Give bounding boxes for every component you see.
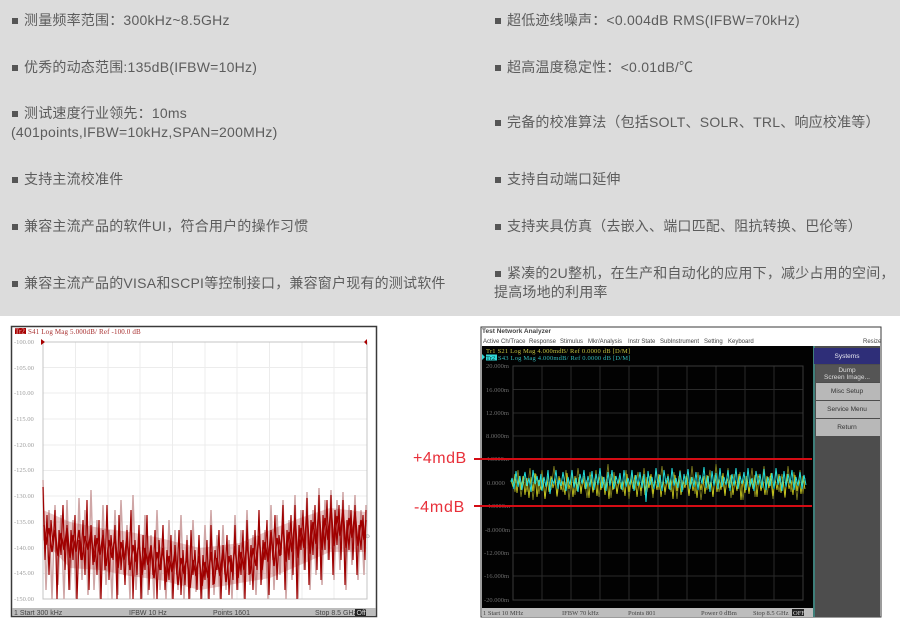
- y axis labels: -20.000m: [484, 597, 509, 604]
- window title and menu: Instr State: [628, 339, 656, 345]
- status bar: 1 Start 10 MHz: [483, 610, 523, 617]
- chart header: Tr2: [15, 328, 25, 336]
- window title and menu: Setting: [704, 339, 723, 345]
- text: compact chassis: 提高场地的利用率: [494, 284, 608, 300]
- y axis labels: -4.0000m: [485, 503, 510, 510]
- softkey: Service Menu: Service Menu: [827, 406, 867, 413]
- chart status bar: IFBW 10 Hz: [129, 610, 167, 617]
- status bar: Stop 8.5 GHz: [753, 610, 789, 617]
- softkey: Return: [816, 419, 880, 436]
- y axis labels: -130.00: [14, 493, 34, 500]
- softkey: Misc Setup: [816, 383, 880, 400]
- window title and menu: Response: [529, 339, 557, 345]
- y axis labels: -150.00: [14, 596, 34, 603]
- yellow trace: [511, 473, 805, 500]
- window title and menu: Keyboard: [728, 339, 754, 345]
- y axis labels: [14, 339, 34, 603]
- text: trace noise: 超低迹线噪声：<0.004dB RMS(IFBW=70kHz): [507, 12, 800, 28]
- text: fixture simulation: 支持夹具仿真（去嵌入、端口匹配、阻抗转换、巴伦等）: [507, 218, 862, 234]
- y axis labels: -105.00: [14, 365, 34, 372]
- chart header: S41 Log Mag 5.000dB/ Ref -100.0 dB: [28, 328, 141, 336]
- text: software UI: 兼容主流产品的软件UI，符合用户的操作习惯: [24, 218, 308, 234]
- y axis labels: -135.00: [14, 519, 34, 526]
- softkey: Dump Screen Image: [816, 365, 880, 382]
- y axis labels: 4.0000m: [486, 456, 509, 463]
- window title and menu: Active Ch/Trace: [483, 339, 526, 345]
- plot grid: [513, 366, 803, 600]
- y axis labels: -12.000m: [484, 550, 509, 557]
- text: test speed: (401points,IFBW=10kHz,SPAN=200MHz): [11, 124, 278, 140]
- text: temperature stability: 超高温度稳定性：<0.01dB/℃: [507, 59, 693, 75]
- status bar: OFF: [793, 610, 805, 617]
- window title and menu: Mkr/Analysis: [588, 339, 622, 345]
- text: compact chassis: 紧凑的2U整机，在生产和自动化的应用下，减少占用的空间，: [507, 265, 895, 281]
- status bar: Power 0 dBm: [701, 610, 737, 617]
- status bar: IFBW 70 kHz: [562, 610, 599, 617]
- softkey panel: [813, 346, 880, 617]
- text: control interfaces: 兼容主流产品的VISA和SCPI等控制接口，兼容窗户现有的测试软件: [24, 275, 446, 291]
- chart: trace noise screenshot: [481, 327, 882, 617]
- window title and menu: [482, 328, 882, 345]
- text: compact chassis: [494, 265, 895, 300]
- y axis labels: -120.00: [14, 442, 34, 449]
- cyan trace: [511, 467, 806, 502]
- trace legend: S43 Log Mag 4.000mdB/ Ref 0.0000 dB [D/M]: [498, 355, 631, 362]
- trace legend: [482, 348, 631, 362]
- chart status bar: Points 1601: [213, 610, 250, 617]
- y axis labels: 8.0000m: [486, 433, 509, 440]
- y axis labels: 12.000m: [486, 410, 509, 417]
- y axis labels: -110.00: [14, 390, 34, 397]
- text: mainstream cal kits: 支持主流校准件: [24, 171, 123, 187]
- olive trace shadow: [512, 464, 805, 500]
- chart: dynamic range screenshot: [12, 326, 376, 617]
- y axis labels: [484, 363, 510, 604]
- text: dynamic range: 优秀的动态范围:135dB(IFBW=10Hz): [24, 59, 257, 75]
- window title and menu: SubInstrument: [660, 339, 699, 345]
- window title and menu: Stimulus: [560, 339, 583, 345]
- chart status bar: 1 Start 300 kHz: [14, 610, 63, 617]
- chart status bar: Stop 8.5 GHz: [315, 610, 358, 617]
- y axis labels: 16.000m: [486, 387, 509, 394]
- softkey: Misc Setup: Misc Setup: [831, 388, 863, 395]
- trace legend: Tr2: [486, 355, 495, 362]
- annotation: +4mdB limit line: +4mdB: [413, 450, 467, 467]
- softkey: Service Menu: [816, 401, 880, 418]
- softkey: Dump Screen Image: Screen Image...: [824, 374, 870, 381]
- trace legend: Tr1 S21 Log Mag 4.000mdB/ Ref 0.0000 dB [D/M]: [486, 348, 630, 355]
- y axis labels: -115.00: [14, 416, 34, 423]
- softkey: Dump Screen Image: Dump: [838, 367, 856, 374]
- y axis labels: -140.00: [14, 545, 34, 552]
- panel: feature list: [0, 0, 900, 316]
- chart status bar: [12, 608, 376, 617]
- text: port extension: 支持自动端口延伸: [507, 171, 621, 187]
- chart header: [15, 328, 367, 345]
- status bar: Points 801: [628, 610, 656, 617]
- softkey: Systems: Systems: [835, 353, 860, 360]
- chart: dynamic range screenshot: D: [366, 535, 370, 540]
- status bar: [482, 608, 813, 617]
- window title and menu: Resize: [863, 339, 882, 345]
- softkey: Systems: [814, 348, 880, 364]
- y axis labels: -16.000m: [484, 573, 509, 580]
- annotation: -4mdB limit line: -4mdB: [414, 499, 465, 516]
- text: test speed: [11, 105, 278, 140]
- y axis labels: 20.000m: [486, 363, 509, 370]
- window title and menu: Test Network Analyzer: [482, 328, 551, 335]
- text: frequency range: 测量频率范围：300kHz~8.5GHz: [24, 12, 230, 28]
- y axis labels: 0.0000: [487, 480, 505, 487]
- text: test speed: 测试速度行业领先：10ms: [24, 105, 187, 121]
- chart status bar: Off: [356, 610, 366, 617]
- y axis labels: -145.00: [14, 570, 34, 577]
- y axis labels: -125.00: [14, 467, 34, 474]
- noise floor trace: [43, 480, 366, 599]
- y axis labels: -100.00: [14, 339, 34, 346]
- text: calibration algorithms: 完备的校准算法（包括SOLT、SOLR、TRL、响应校准等）: [507, 114, 880, 130]
- y axis labels: -8.0000m: [485, 527, 510, 534]
- softkey: Return: Return: [837, 424, 857, 431]
